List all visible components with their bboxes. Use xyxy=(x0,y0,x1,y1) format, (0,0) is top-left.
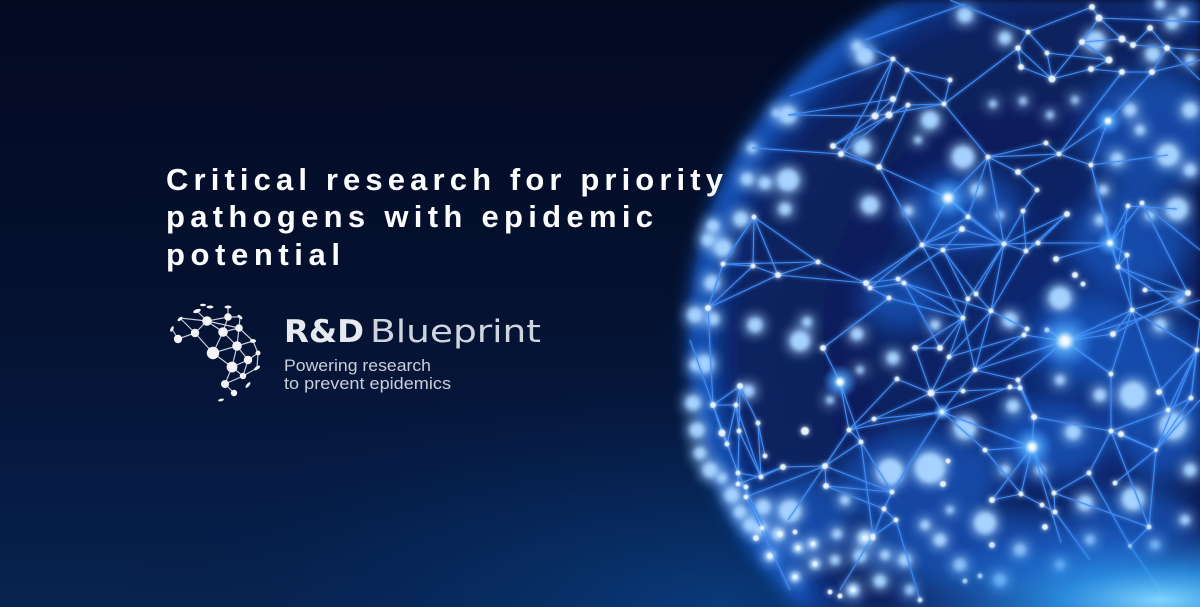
bottom right glow xyxy=(860,520,1200,607)
title: potential xyxy=(166,237,340,272)
sharp nodes xyxy=(705,4,1200,602)
logo wordmark: R&D xyxy=(284,314,364,350)
logo tagline: to prevent epidemics xyxy=(284,375,451,393)
bright starburst nodes xyxy=(822,106,1124,469)
logo tagline xyxy=(284,357,451,393)
logo tagline: Powering research xyxy=(284,357,431,375)
connection lines xyxy=(690,0,1200,600)
logo wordmark xyxy=(284,314,541,350)
blurred large points xyxy=(686,0,1197,596)
logo: Africa network icon xyxy=(169,304,261,402)
bluish haze patches xyxy=(750,70,1200,585)
sphere body xyxy=(688,0,1200,607)
rim haze xyxy=(699,12,901,600)
title: Critical research for priority xyxy=(166,162,724,197)
logo wordmark: Blueprint xyxy=(370,314,541,350)
title: pathogens with epidemic xyxy=(166,199,653,234)
